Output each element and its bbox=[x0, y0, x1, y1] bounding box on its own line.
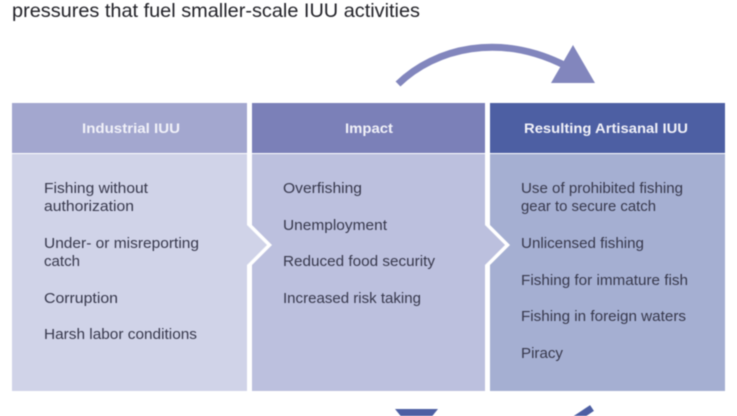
header: resulting artisanal IUU: Resulting Artisanal IUU bbox=[524, 120, 688, 136]
list: artisanal IUU items: gear to secure catch bbox=[521, 198, 656, 215]
arrow: top curved arrow bbox=[398, 45, 595, 84]
list: industrial IUU items: authorization bbox=[44, 198, 134, 215]
header: industrial IUU: Industrial IUU bbox=[82, 120, 180, 136]
list: artisanal IUU items: Unlicensed fishing bbox=[521, 235, 644, 252]
panel body bbox=[490, 154, 725, 391]
list: industrial IUU items: Under- or misreporting bbox=[44, 235, 199, 252]
panel body bbox=[12, 154, 267, 391]
list: impact items: Overfishing bbox=[283, 180, 362, 197]
panel: impact bbox=[252, 103, 505, 391]
panel: industrial IUU bbox=[12, 103, 267, 391]
list: impact items bbox=[283, 180, 435, 307]
list: artisanal IUU items: Fishing in foreign waters bbox=[521, 308, 686, 325]
list: impact items: Reduced food security bbox=[283, 253, 435, 270]
list: industrial IUU items: Harsh labor conditions bbox=[44, 326, 197, 343]
list: industrial IUU items bbox=[44, 180, 199, 343]
title: pressures that fuel smaller-scale IUU activities bbox=[12, 0, 420, 22]
panel: resulting artisanal IUU bbox=[490, 103, 725, 391]
header: impact: Impact bbox=[345, 120, 393, 136]
header: industrial IUU bbox=[12, 103, 247, 153]
header: impact bbox=[252, 103, 485, 153]
panel body bbox=[252, 154, 505, 391]
header: resulting artisanal IUU bbox=[490, 103, 725, 153]
list: industrial IUU items: catch bbox=[44, 253, 80, 270]
list: artisanal IUU items: Piracy bbox=[521, 345, 563, 362]
list: industrial IUU items: Fishing without bbox=[44, 180, 149, 197]
list: artisanal IUU items: Fishing for immature fish bbox=[521, 272, 688, 289]
arrow: bottom curved arrow bbox=[395, 408, 592, 416]
list: artisanal IUU items: Use of prohibited fishing bbox=[521, 180, 683, 197]
list: artisanal IUU items bbox=[521, 180, 688, 362]
list: impact items: Unemployment bbox=[283, 217, 388, 234]
list: impact items: Increased risk taking bbox=[283, 290, 421, 307]
list: industrial IUU items: Corruption bbox=[44, 290, 118, 307]
